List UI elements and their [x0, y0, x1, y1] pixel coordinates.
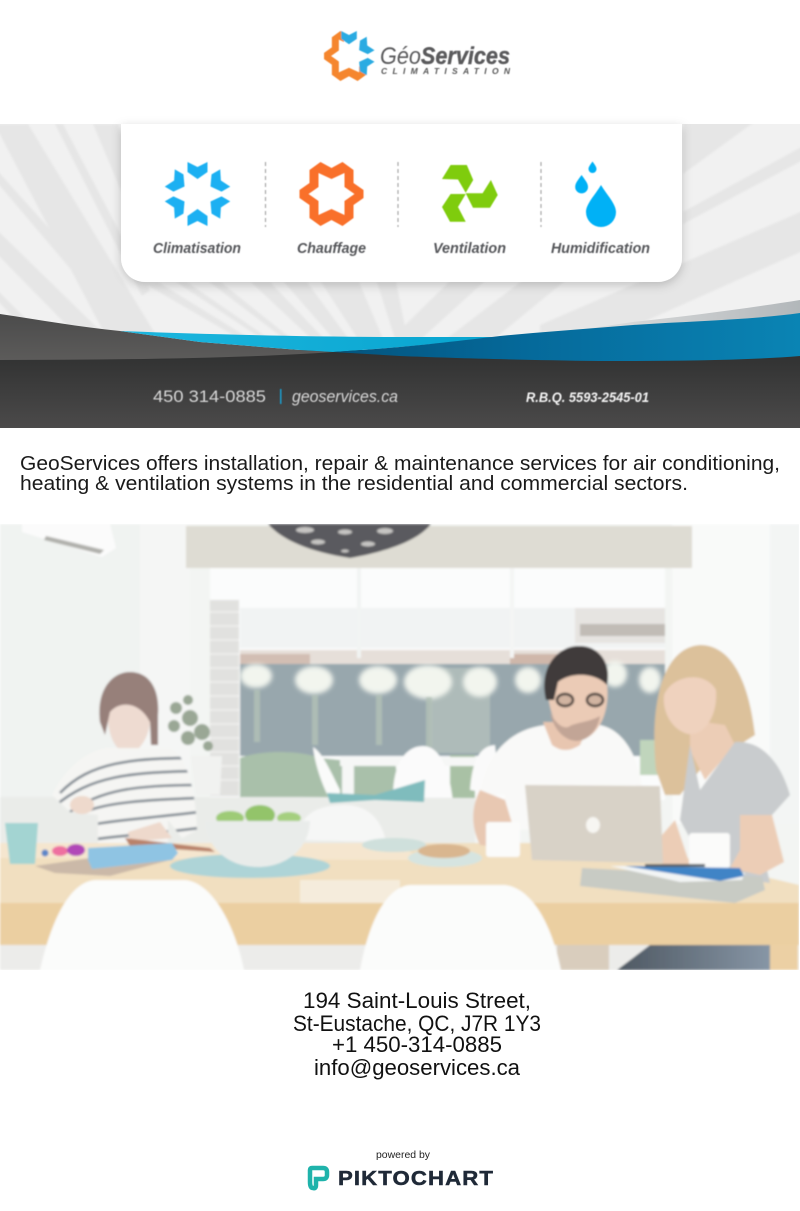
window [210, 568, 665, 802]
arm [472, 790, 512, 846]
icon: climatisation [165, 162, 230, 226]
dividers [266, 162, 541, 227]
air conditioner [22, 524, 116, 557]
banner contact line: 450 314-0885 [153, 387, 266, 406]
woman [654, 645, 790, 883]
banner contact line [153, 387, 649, 406]
window mullions [357, 568, 361, 658]
contact details: 194 Saint-Louis Street, [303, 988, 531, 1013]
green bowl of apples [205, 805, 310, 867]
man's legs [557, 945, 609, 970]
outdoor chairs [313, 747, 340, 800]
pencil case [88, 843, 178, 869]
service labels: Chauffage [297, 241, 366, 257]
woman's jeans [617, 945, 770, 970]
chair behind table [305, 806, 384, 841]
photo: family at dining table [0, 524, 800, 970]
icon: chauffage [300, 162, 364, 226]
card: services [121, 124, 682, 282]
laptop [525, 785, 663, 863]
arm [730, 815, 784, 875]
placemat [170, 854, 330, 878]
powered by: powered by [376, 1149, 431, 1161]
shirt [680, 742, 790, 883]
contact details: info@geoservices.ca [314, 1055, 521, 1080]
logo: GeoServices [324, 31, 511, 81]
service labels: Humidification [551, 241, 650, 257]
service labels: Climatisation [153, 241, 241, 257]
chairs foreground [40, 880, 561, 970]
sweater [52, 748, 197, 845]
glasses [557, 694, 603, 706]
hair [99, 672, 158, 745]
contact details [293, 988, 541, 1080]
table [0, 843, 799, 970]
icon: ventilation [442, 165, 498, 222]
plant [168, 695, 222, 795]
logo wordmark: GéoServices [380, 43, 510, 70]
intro text: heating & ventilation systems in the residential and commercial sectors. [20, 473, 688, 495]
window blind [186, 526, 692, 568]
folder and papers [580, 864, 765, 903]
silver swoosh [550, 300, 800, 334]
pencils [125, 838, 215, 852]
intro text [20, 453, 780, 495]
hedge [240, 752, 400, 800]
man [473, 646, 642, 850]
sofa [0, 797, 475, 845]
light blue wave [120, 331, 505, 352]
fence [240, 664, 665, 756]
icon: humidification drops [575, 162, 616, 227]
face [547, 672, 608, 741]
service labels: Ventilation [433, 241, 506, 257]
logo tagline: CLIMATISATION [381, 66, 511, 76]
banner rays background [0, 124, 800, 337]
neck [543, 722, 590, 750]
face [107, 704, 151, 748]
logo icon: star [324, 31, 375, 81]
hair back [654, 645, 755, 795]
banner: services header [0, 120, 800, 450]
dark band [0, 350, 800, 428]
banner contact line: R.B.Q. 5593-2545-01 [526, 390, 649, 405]
contact details: +1 450-314-0885 [332, 1032, 502, 1057]
footer: powered by Piktochart [310, 1149, 494, 1190]
shirt [494, 724, 634, 757]
trees [240, 661, 661, 699]
piktochart logo mark [310, 1168, 327, 1188]
intro text: GeoServices offers installation, repair & maintenance services for air conditioning, [20, 453, 780, 475]
plates and cookies [362, 838, 482, 867]
brick pillar [210, 600, 239, 796]
table leg [770, 945, 798, 970]
glass [5, 823, 38, 864]
banner contact line: geoservices.ca [292, 387, 398, 406]
piktochart wordmark: PIKTOCHART [338, 1168, 494, 1190]
pens and toys [42, 844, 85, 856]
neck and chest [690, 720, 735, 780]
wall [190, 568, 799, 884]
service labels [153, 241, 650, 257]
man's mug [486, 822, 520, 857]
beard [550, 712, 600, 741]
girl [52, 672, 200, 845]
dark blue wave [333, 313, 800, 361]
pendant lamp [268, 524, 431, 558]
apple logo [586, 817, 600, 833]
hair [544, 646, 608, 700]
face [664, 677, 716, 734]
woman's mug [689, 833, 730, 868]
sketchbook [35, 858, 170, 876]
grey wave [0, 314, 333, 360]
floor [2, 946, 645, 968]
cushion [327, 780, 425, 803]
arms [70, 796, 94, 814]
contact details: St-Eustache, QC, J7R 1Y3 [293, 1011, 541, 1036]
